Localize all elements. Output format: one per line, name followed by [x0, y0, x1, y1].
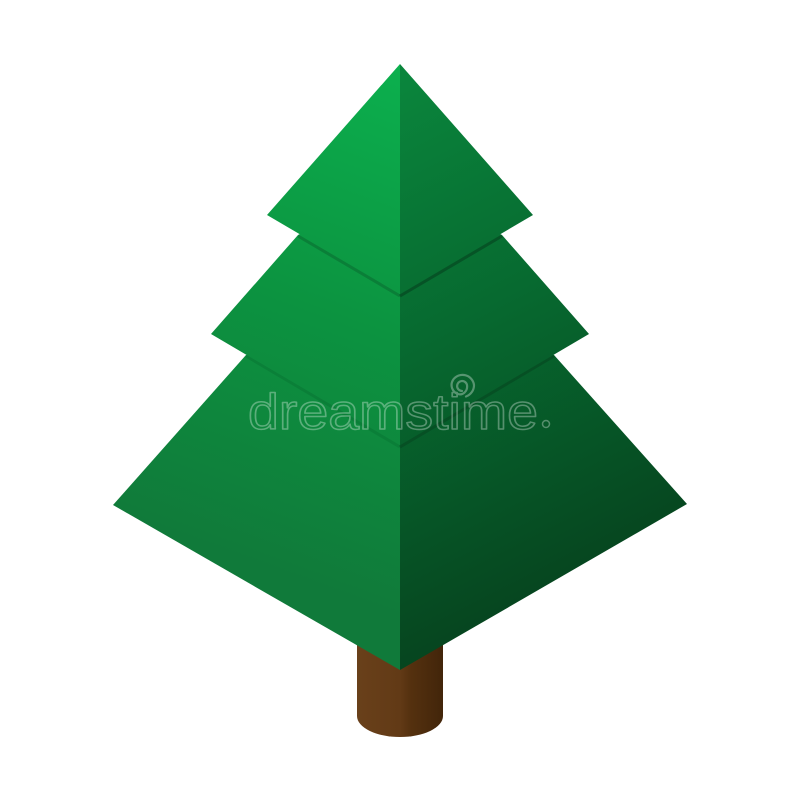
shadow: under top tier: [298, 236, 502, 296]
icon: watermark spiral: [452, 375, 474, 396]
shadow: under middle tier: [246, 356, 554, 447]
watermark: [248, 375, 550, 440]
trunk: [357, 640, 443, 737]
tier: bottom foliage: [113, 300, 687, 670]
icon: watermark registered mark: [542, 420, 550, 428]
watermark text: dreamstime: [248, 384, 538, 440]
tier: middle foliage: [211, 180, 589, 445]
tier: top foliage: [267, 64, 533, 293]
